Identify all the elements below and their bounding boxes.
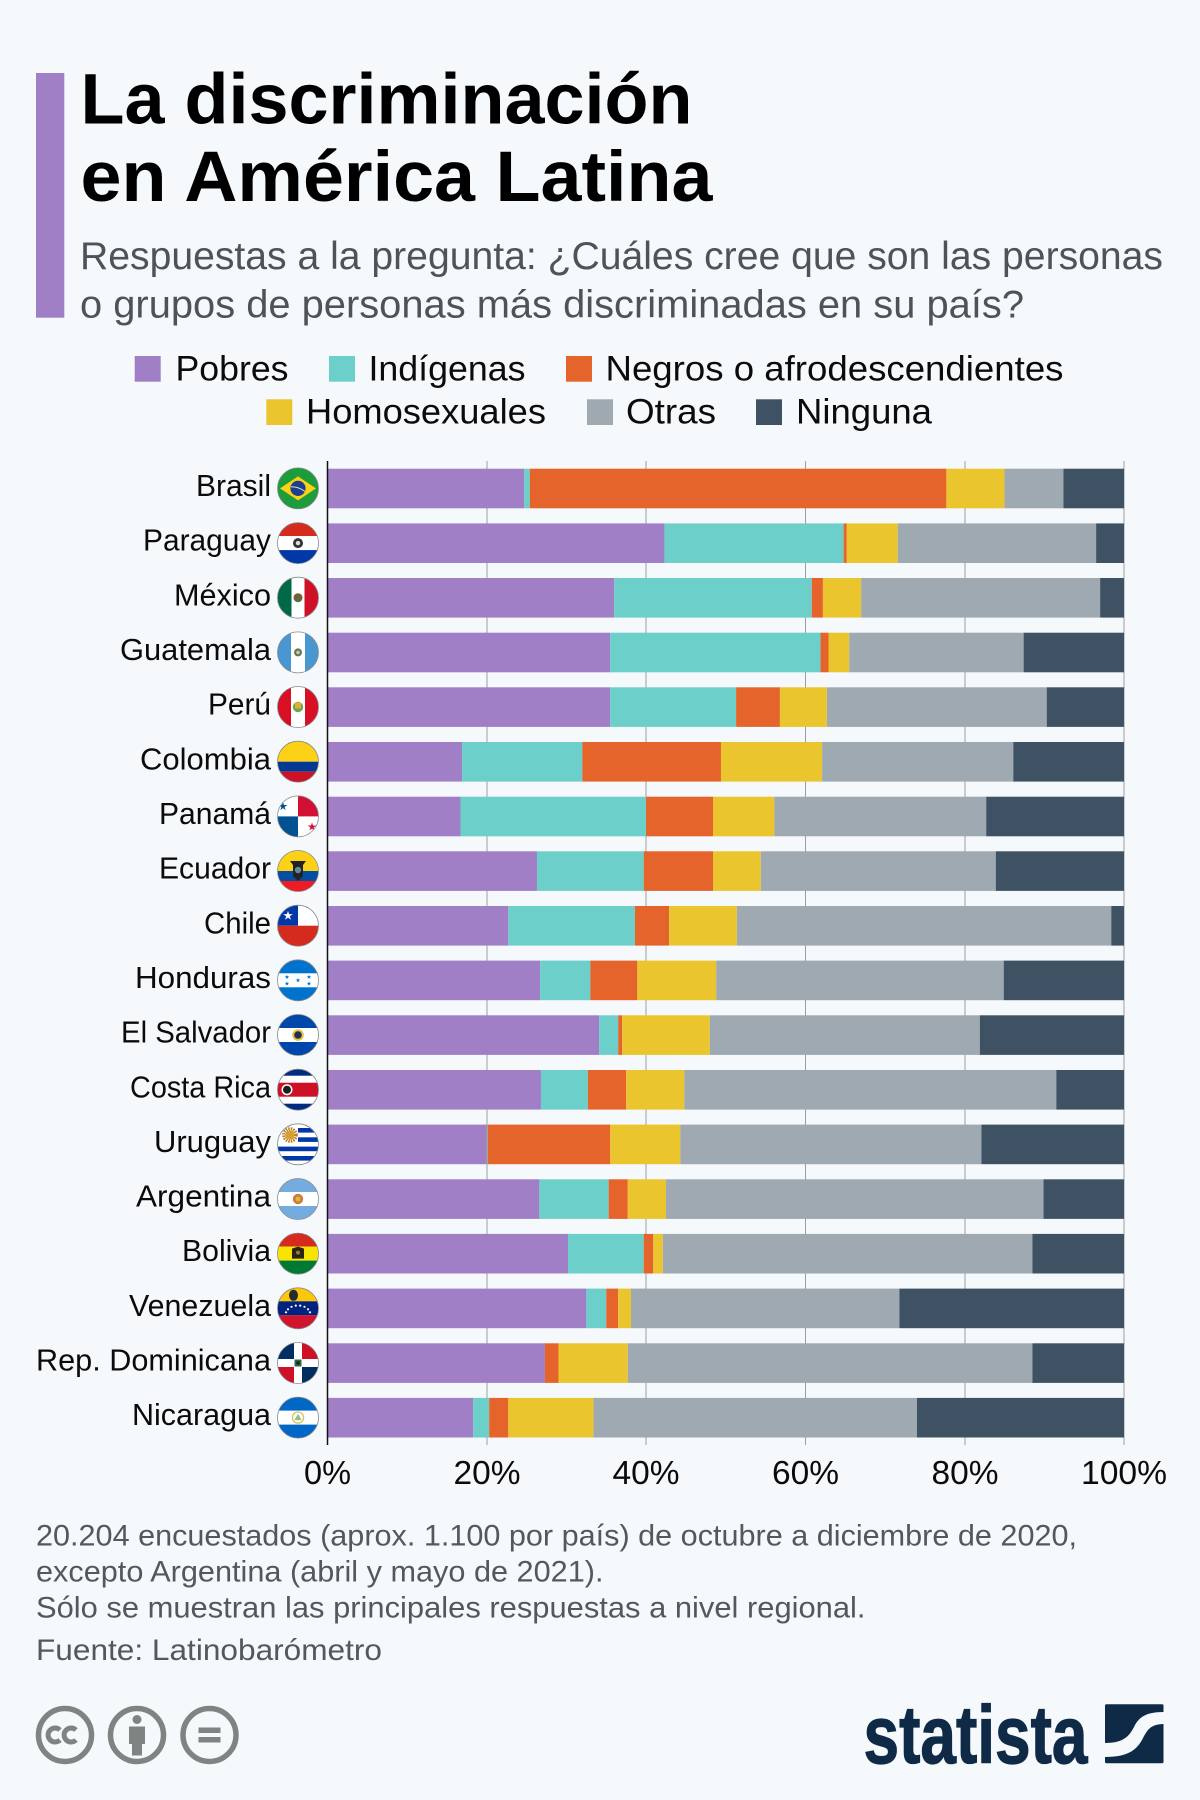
row: Panamá <box>159 795 1124 837</box>
logo mark <box>1105 1704 1164 1763</box>
source: Fuente: Latinobarómetro <box>36 1634 382 1667</box>
x axis labels: 40% <box>612 1454 680 1491</box>
flag: Perú <box>277 686 319 728</box>
legend item: Ninguna: Ninguna <box>796 392 933 431</box>
row: Perú: Perú <box>208 687 271 722</box>
legend item: Otras <box>587 392 716 431</box>
flag: Nicaragua <box>277 1397 319 1439</box>
legend item: Homosexuales: Homosexuales <box>306 392 546 431</box>
flag: Colombia <box>277 741 319 783</box>
flag: Guatemala <box>277 631 319 673</box>
subtitle: Respuestas a la pregunta: ¿Cuáles cree que son las personas <box>80 235 1163 278</box>
row: Argentina <box>136 1178 1124 1220</box>
row: Brasil <box>196 467 1124 509</box>
row: Colombia: Colombia <box>140 741 272 776</box>
footnote: Sólo se muestran las principales respuestas a nivel regional. <box>36 1592 866 1625</box>
flag: Rep. Dominicana <box>277 1342 319 1384</box>
legend item: Otras: Otras <box>626 392 716 431</box>
row: Guatemala: Guatemala <box>120 632 272 667</box>
row: Costa Rica <box>130 1069 1124 1111</box>
row: Bolivia <box>182 1233 1124 1275</box>
row: Panamá: Panamá <box>159 796 272 831</box>
flag: Argentina <box>277 1178 319 1220</box>
x axis labels: 60% <box>772 1454 839 1491</box>
x axis labels: 20% <box>454 1454 520 1491</box>
row: Paraguay <box>143 522 1124 564</box>
row: México: México <box>174 577 271 612</box>
row: Costa Rica: Costa Rica <box>130 1069 272 1104</box>
flag: Venezuela <box>277 1287 319 1329</box>
stacked bar chart <box>36 461 1167 1491</box>
flag: Paraguay <box>277 522 319 564</box>
legend item: Negros o afrodescendientes: Negros o afrodescendientes <box>606 349 1064 388</box>
row: Venezuela <box>129 1287 1124 1329</box>
row: Perú <box>208 686 1124 728</box>
x axis labels: 100% <box>1081 1454 1167 1491</box>
x axis labels: 80% <box>932 1454 998 1491</box>
row: Honduras <box>135 959 1124 1001</box>
flag: México <box>277 577 319 619</box>
row: El Salvador: El Salvador <box>121 1015 271 1050</box>
icon: no derivatives <box>183 1708 236 1762</box>
row: Argentina: Argentina <box>136 1179 272 1214</box>
legend item: Indígenas: Indígenas <box>368 349 526 388</box>
x axis labels: 0% <box>304 1454 351 1491</box>
flag: Uruguay <box>277 1123 319 1165</box>
row: Ecuador <box>159 850 1124 892</box>
vertical axis <box>326 461 328 1445</box>
footnote <box>36 1520 1077 1625</box>
flag: Panamá <box>277 795 319 837</box>
row: Chile: Chile <box>204 905 271 940</box>
row: Nicaragua: Nicaragua <box>132 1397 272 1432</box>
row: Guatemala <box>120 631 1124 673</box>
row: México <box>174 577 1124 619</box>
subtitle <box>80 235 1163 326</box>
row: Rep. Dominicana: Rep. Dominicana <box>36 1343 272 1378</box>
row: Uruguay <box>154 1123 1124 1165</box>
flag: El Salvador <box>277 1014 319 1056</box>
flag: Chile <box>277 905 319 947</box>
statista logo: statista <box>864 1690 1089 1781</box>
subtitle: o grupos de personas más discriminadas en su país? <box>80 283 1024 326</box>
flag: Costa Rica <box>277 1069 319 1111</box>
title <box>80 60 713 217</box>
row: Bolivia: Bolivia <box>182 1233 272 1268</box>
row: Colombia <box>140 741 1124 783</box>
row: El Salvador <box>121 1014 1124 1056</box>
footnote: 20.204 encuestados (aprox. 1.100 por país) de octubre a diciembre de 2020, <box>36 1520 1077 1553</box>
row: Brasil: Brasil <box>196 468 271 503</box>
row: Rep. Dominicana <box>36 1342 1124 1384</box>
title: en América Latina <box>80 138 713 217</box>
flag: Ecuador <box>277 850 319 892</box>
row: Uruguay: Uruguay <box>154 1124 271 1159</box>
row: Nicaragua <box>132 1397 1124 1439</box>
row: Venezuela: Venezuela <box>129 1288 272 1323</box>
title: La discriminación <box>80 60 692 139</box>
x axis labels <box>304 1454 1167 1491</box>
legend item: Pobres: Pobres <box>176 349 288 388</box>
icon: attribution <box>110 1708 164 1762</box>
row: Paraguay: Paraguay <box>143 523 271 558</box>
row: Honduras: Honduras <box>135 960 271 995</box>
legend <box>135 349 1063 431</box>
icon: creative commons <box>38 1708 92 1762</box>
row: Chile <box>204 905 1124 947</box>
footnote: excepto Argentina (abril y mayo de 2021). <box>36 1556 604 1589</box>
flag: Honduras <box>277 959 319 1001</box>
flag: Bolivia <box>277 1233 319 1275</box>
row: Ecuador: Ecuador <box>159 851 271 886</box>
flag: Brasil <box>277 467 319 509</box>
accent bar <box>36 73 64 318</box>
